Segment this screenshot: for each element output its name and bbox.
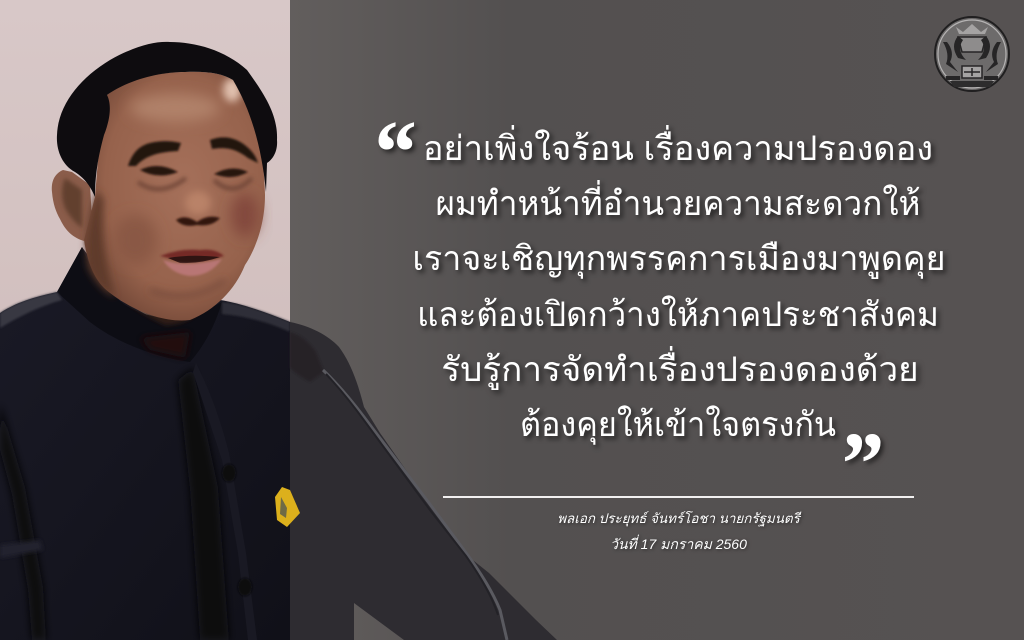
attribution: พลเอก ประยุทธ์ จันทร์โอชา นายกรัฐมนตรี	[557, 511, 800, 526]
under-eye bags	[138, 178, 186, 189]
microphone	[290, 332, 507, 640]
mouth	[160, 250, 224, 262]
quote text: และต้องเปิดกว้างให้ภาคประชาสังคม	[417, 296, 939, 334]
jacket arm under overlay	[290, 322, 557, 640]
hair	[57, 42, 277, 197]
quote text: อย่าเพิ่งใจร้อน เรื่องความปรองดอง	[423, 130, 933, 168]
badge	[275, 487, 300, 527]
emblem	[935, 17, 1009, 91]
right panel	[290, 0, 1024, 640]
nose	[185, 191, 211, 215]
quote text: เราจะเชิญทุกพรรคการเมืองมาพูดคุย	[412, 240, 946, 278]
quote text: ผมทำหน้าที่อำนวยความสะดวกให้	[436, 185, 920, 223]
quote text: รับรู้การจัดทำเรื่องปรองดองด้วย	[441, 351, 919, 389]
photo background	[0, 0, 290, 640]
attribution: วันที่ 17 มกราคม 2560	[610, 536, 747, 552]
cheeks	[231, 193, 259, 237]
quote marks	[370, 103, 886, 514]
neck shadow	[85, 240, 240, 325]
forehead shine	[223, 78, 241, 102]
closing quotation mark: ”	[837, 415, 882, 514]
quote text	[412, 125, 948, 448]
eyebrows	[128, 141, 181, 166]
opening quotation mark: “	[370, 103, 415, 202]
quote text: ต้องคุยให้เข้าใจตรงกัน	[520, 406, 836, 444]
jacket	[0, 247, 290, 640]
head	[52, 72, 265, 320]
eyes	[140, 166, 178, 176]
divider	[443, 496, 914, 498]
attribution	[557, 511, 803, 552]
shading left of face	[87, 190, 115, 297]
